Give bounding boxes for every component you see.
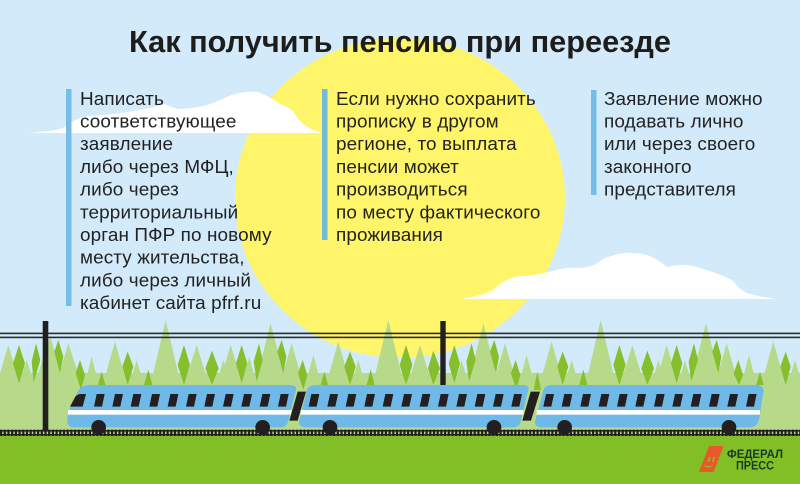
forest xyxy=(0,320,800,437)
title: Как получить пенсию при переезде xyxy=(129,24,671,59)
text: column 1: соответствующее xyxy=(80,112,237,132)
overhead wires xyxy=(0,333,800,338)
text: column 2 xyxy=(336,89,540,246)
text: column 2: Если нужно сохранить xyxy=(336,89,536,110)
text: column 1: орган ПФР по новому xyxy=(80,225,272,246)
text: column 2: производиться xyxy=(336,180,468,201)
sun xyxy=(235,38,565,358)
text: column 1: месту жительства, xyxy=(80,248,245,269)
logo: Federal Press xyxy=(699,446,783,472)
text: column 3 xyxy=(604,89,763,201)
wagon 2 xyxy=(299,385,529,427)
text: column 3: подавать лично xyxy=(604,112,744,132)
logo: Federal Press: ПРЕСС xyxy=(736,460,774,472)
text: column 1: либо через МФЦ, xyxy=(80,157,234,178)
dark trees xyxy=(13,340,791,390)
text: column 3: законного xyxy=(604,157,692,178)
cloud: left xyxy=(25,92,322,133)
text: column 2: регионе, то выплата xyxy=(336,134,517,155)
text: column 1: Написать xyxy=(80,89,164,110)
ground xyxy=(0,436,800,484)
text: column 1: либо через личный xyxy=(80,270,251,291)
marker bar: column 1 xyxy=(66,89,72,306)
text: column 3: или через своего xyxy=(604,134,755,155)
marker bar: column 3 xyxy=(591,90,596,195)
train xyxy=(67,385,763,435)
pole left xyxy=(43,321,48,431)
cloud: right xyxy=(460,253,777,299)
marker bar: column 2 xyxy=(322,89,328,240)
text: column 3: Заявление можно xyxy=(604,89,763,110)
logo text: ФЕДЕРАЛ xyxy=(727,449,783,461)
text: column 1: заявление xyxy=(80,134,173,155)
text: column 3: представителя xyxy=(604,180,736,201)
pole right xyxy=(440,321,446,385)
text: column 1 xyxy=(80,89,272,314)
text: column 2: по месту фактического xyxy=(336,202,540,223)
text: column 1: кабинет сайта pfrf.ru xyxy=(80,293,261,314)
wagon 1 xyxy=(67,385,296,427)
text: column 2: пенсии может xyxy=(336,157,459,178)
wheels xyxy=(91,420,736,435)
wagon 3 xyxy=(535,385,763,427)
text: column 2: прописку в другом xyxy=(336,112,499,132)
logo icon xyxy=(699,446,724,472)
light trees xyxy=(0,320,800,437)
railway track xyxy=(0,430,800,436)
text: column 1: либо через xyxy=(80,180,179,201)
couplers xyxy=(289,392,540,421)
text: column 2: проживания xyxy=(336,225,443,246)
text: column 1: территориальный xyxy=(80,202,238,223)
